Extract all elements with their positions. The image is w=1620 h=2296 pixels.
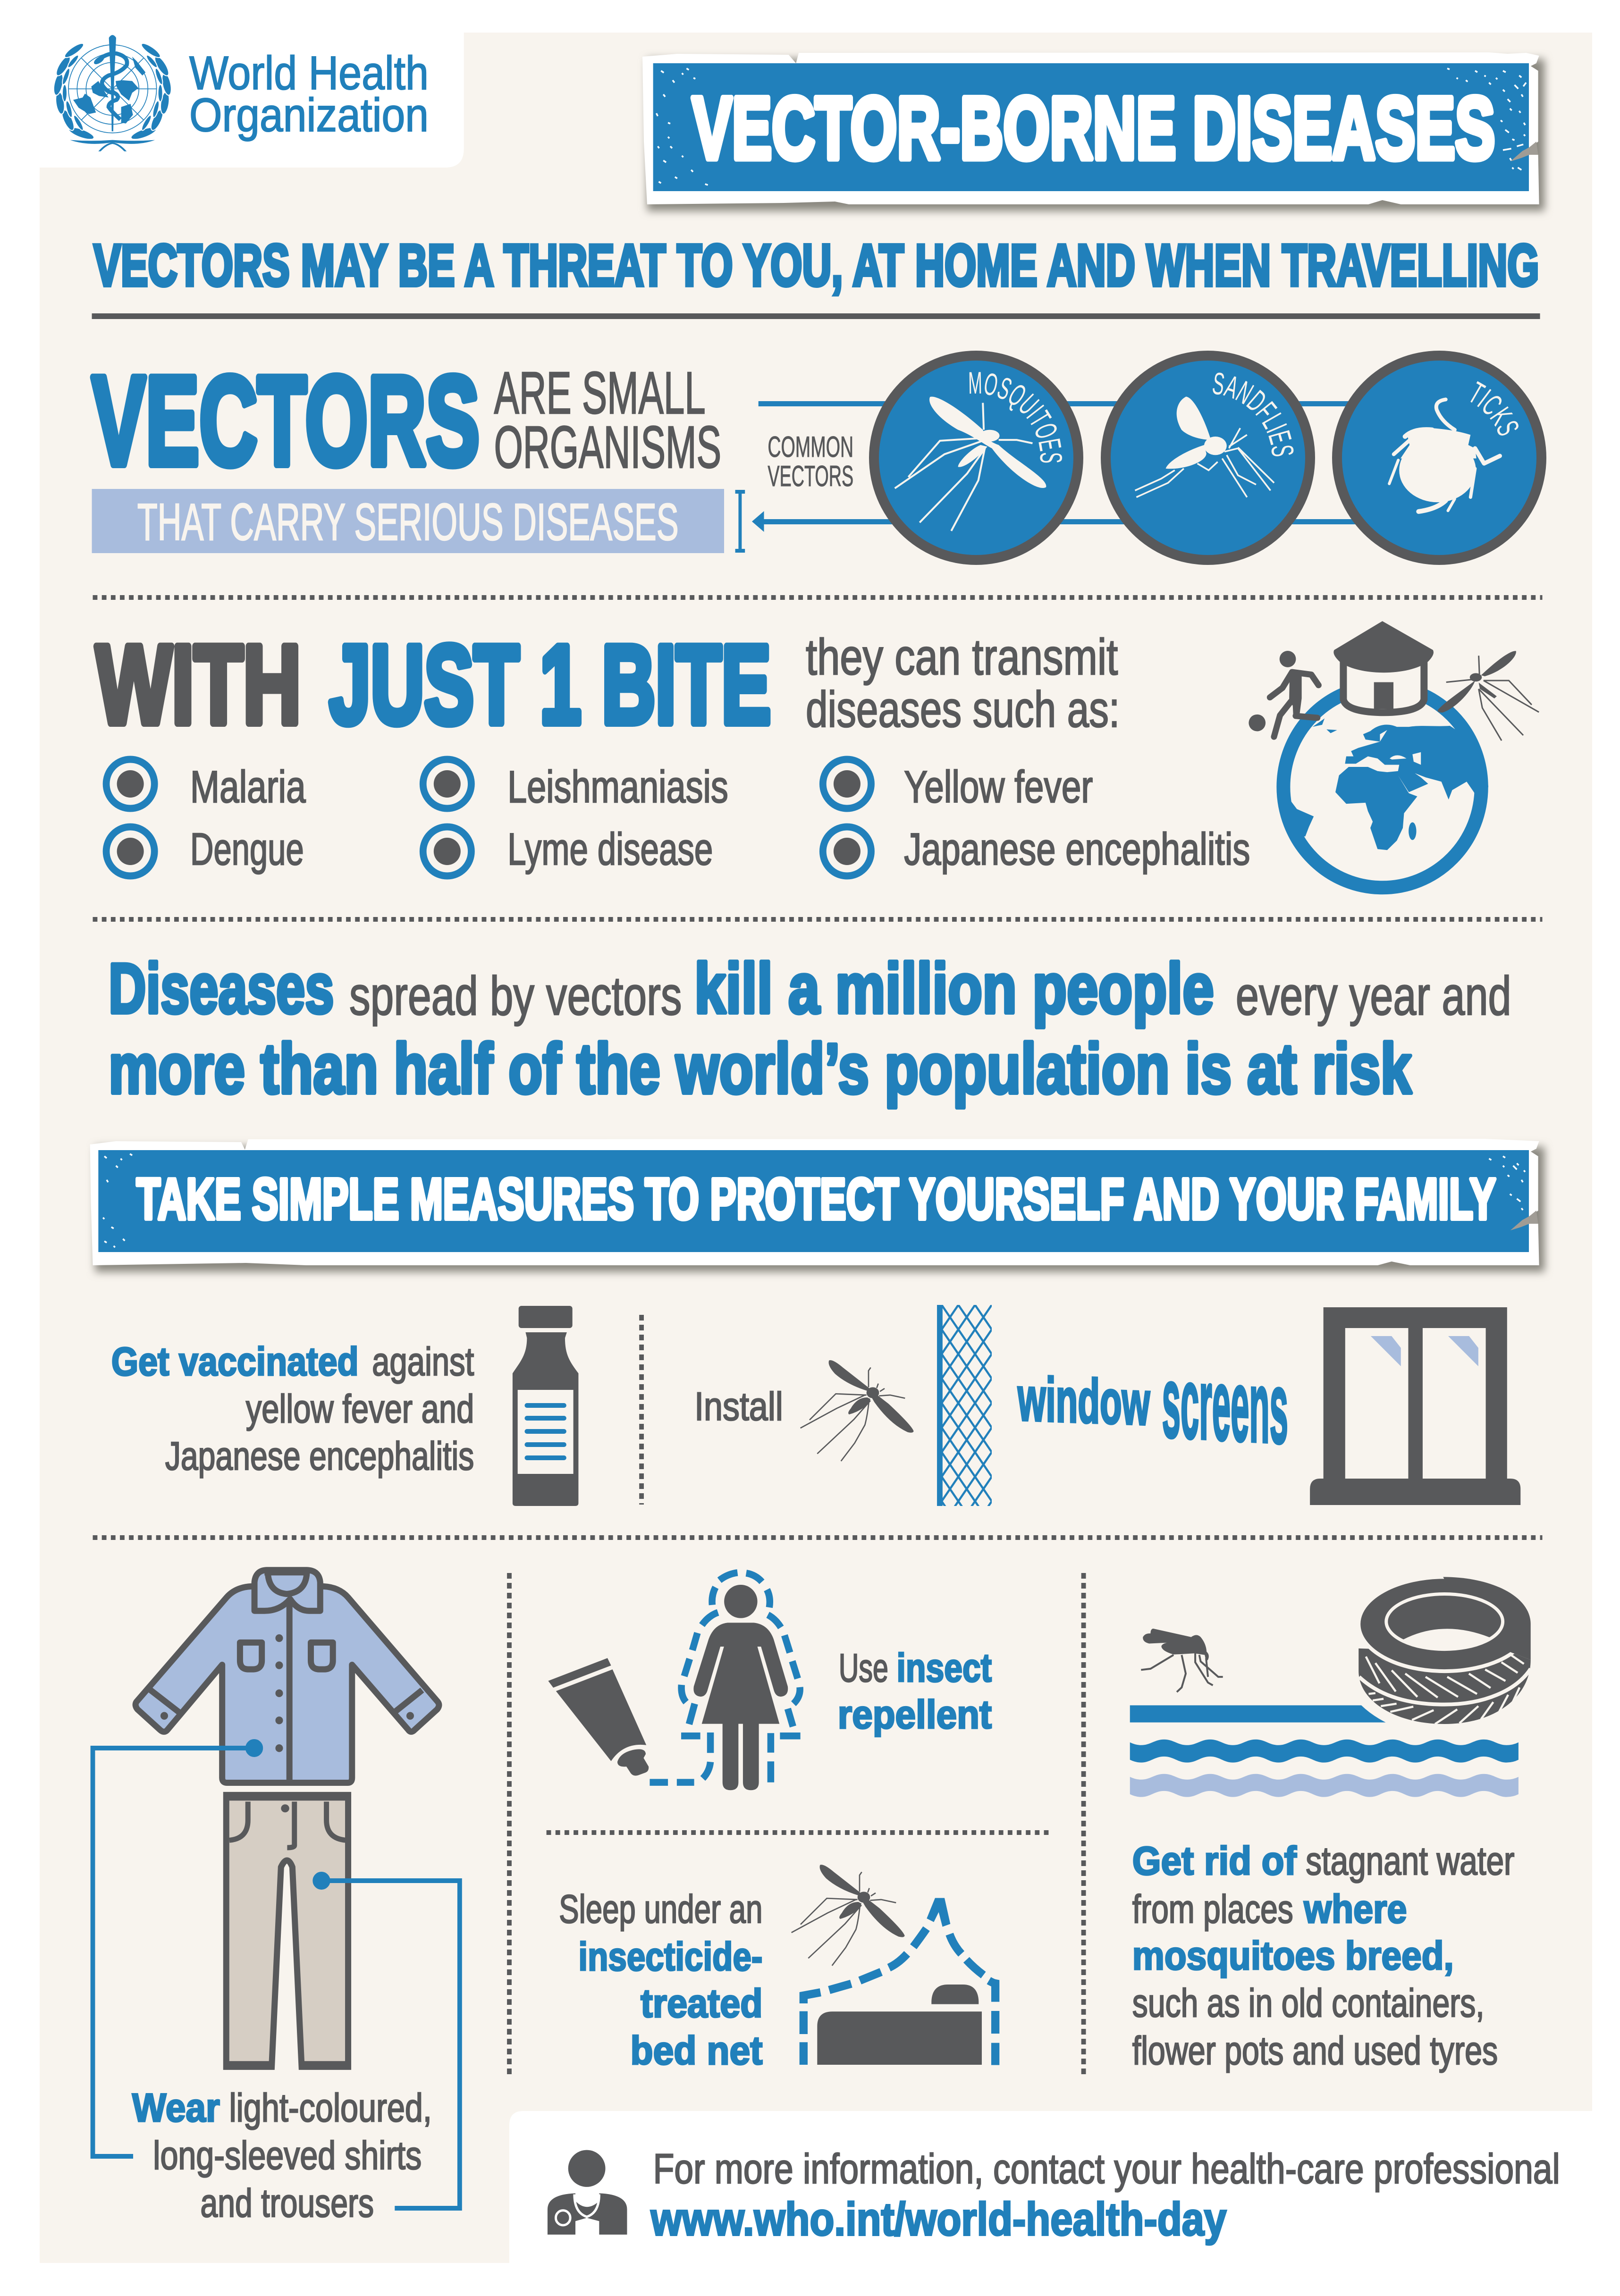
measure text: vaccination (111, 1339, 474, 1478)
WHO name: World Health (189, 47, 429, 100)
vertical dividers (509, 1315, 1084, 2075)
heading: with just 1 bite: they can transmit (806, 628, 1118, 685)
icon: shirt (135, 1570, 439, 1783)
heading: with just 1 bite: JUST 1 BITE (329, 622, 771, 747)
disease list (106, 759, 1250, 876)
text: get rid of stagnant water: from places (1132, 1887, 1293, 1931)
text: window screens (1017, 1345, 1288, 1465)
measure text: vaccination: yellow fever and (246, 1387, 474, 1431)
statistic statement: kill a million people (694, 949, 1214, 1028)
text: wear light-coloured: Wear (132, 2086, 220, 2130)
statistic statement: spread by vectors (349, 966, 682, 1026)
icon: mosquito over net (792, 1865, 905, 1966)
text: get rid of stagnant water: flower pots and used tyres (1132, 2028, 1498, 2073)
icon: stagnant water (1130, 1705, 1519, 1797)
measure text: vaccination: Japanese encephalitis (165, 1434, 474, 1478)
disease list: Yellow fever (904, 762, 1093, 812)
icon: globe with person, house and mosquito (1249, 621, 1539, 888)
text: window screens: window (1017, 1363, 1150, 1438)
text: install: Install (694, 1384, 783, 1429)
icon: vaccine bottle (513, 1306, 578, 1506)
text: get rid of stagnant water (1132, 1839, 1515, 2073)
text: get rid of stagnant water: Get rid of (1132, 1839, 1297, 1883)
text: use insect repellent: insect (897, 1646, 992, 1690)
disease list: Malaria (190, 762, 306, 812)
text: wear light-coloured: long-sleeved shirts (153, 2133, 422, 2178)
icon: mosquitoes circle: MOSQUITOES (968, 365, 1069, 463)
icon: health-care professional (548, 2150, 627, 2235)
icon: mosquito at screen (801, 1360, 914, 1461)
text: use insect repellent: Use (839, 1646, 888, 1690)
text: bed net: Sleep under an (559, 1887, 763, 1931)
icon: net screen (937, 1305, 992, 1506)
text: wear light-coloured: light-coloured, (229, 2086, 432, 2130)
WHO emblem (52, 35, 173, 151)
statistic statement: Diseases (109, 949, 334, 1028)
text: use insect repellent: repellent (838, 1692, 992, 1737)
icon: tyre (1358, 1577, 1531, 1724)
bullets (106, 759, 871, 876)
icon: repellent tube (548, 1658, 649, 1775)
title banner (642, 52, 1544, 211)
icon: trousers (224, 1794, 350, 2068)
footer panel (509, 2111, 1620, 2296)
bracket arrow from vectors (735, 401, 1392, 553)
heading: vectors are small organisms: VECTORS (92, 350, 480, 491)
disease list: Leishmaniasis (507, 762, 728, 812)
heading: with just 1 bite: diseases such as: (806, 681, 1120, 738)
icon: sandflies circle: SANDFLIES (1210, 365, 1300, 458)
icon: mosquito at tyre (1141, 1629, 1223, 1692)
divider (93, 597, 1542, 1538)
icon: figure with repellent outline (650, 1573, 801, 1790)
disease list: Japanese encephalitis (904, 824, 1250, 875)
icon: mosquitoes circle (869, 351, 1083, 565)
label: common vectors: COMMON (768, 431, 853, 463)
banner: take simple measures (90, 1139, 1544, 1272)
WHO name: Organization (189, 89, 429, 142)
icon: bed under net (803, 1898, 996, 2065)
disease list: Dengue (190, 824, 304, 875)
website: www.who.int/world-health-day (650, 2193, 1226, 2245)
heading: with just 1 bite (96, 622, 1120, 747)
disease list: Lyme disease (507, 824, 713, 875)
statistic statement (109, 949, 1511, 1108)
measure text: vaccination: Get vaccinated (111, 1339, 359, 1384)
WHO name (189, 47, 429, 142)
icon: ticks circle (1332, 351, 1546, 565)
text: bed net (559, 1887, 763, 2073)
statistic statement: every year and (1236, 966, 1511, 1026)
icon: sandflies circle (1101, 351, 1315, 565)
text: get rid of stagnant water: where (1303, 1887, 1407, 1931)
text: use insect repellent (838, 1646, 992, 1737)
text: get rid of stagnant water: stagnant water (1306, 1839, 1515, 1883)
text: bed net: treated (641, 1981, 763, 2026)
text: bed net: insecticide- (578, 1934, 763, 1979)
heading: vectors are small organisms: ORGANISMS (494, 414, 721, 480)
divider (547, 1830, 1049, 1835)
icon: window (1310, 1307, 1520, 1505)
label: common vectors (768, 431, 853, 493)
heading: with just 1 bite: WITH (96, 622, 301, 747)
measure text: vaccination: against (372, 1339, 474, 1384)
text: bed net: bed net (630, 2028, 763, 2073)
text: wear light-coloured: and trousers (201, 2181, 374, 2225)
label: common vectors: VECTORS (768, 460, 853, 493)
callout bar: that carry serious diseases: THAT CARRY SERIOUS DISEASES (137, 493, 679, 551)
text: wear light-coloured (132, 2086, 432, 2225)
text: get rid of stagnant water: mosquitoes breed, (1132, 1934, 1454, 1978)
connector: trousers callout line (315, 1874, 460, 2208)
icon: ticks circle: TICKS (1463, 375, 1527, 440)
WHO logo tab background (40, 33, 464, 168)
text: screens (1162, 1345, 1288, 1465)
heading: vectors are small organisms: ARE SMALL (494, 360, 706, 426)
text: get rid of stagnant water: such as in old containers, (1132, 1981, 1485, 2025)
connector: shirt callout line (93, 1741, 261, 2156)
callout bar: that carry serious diseases (92, 489, 724, 553)
